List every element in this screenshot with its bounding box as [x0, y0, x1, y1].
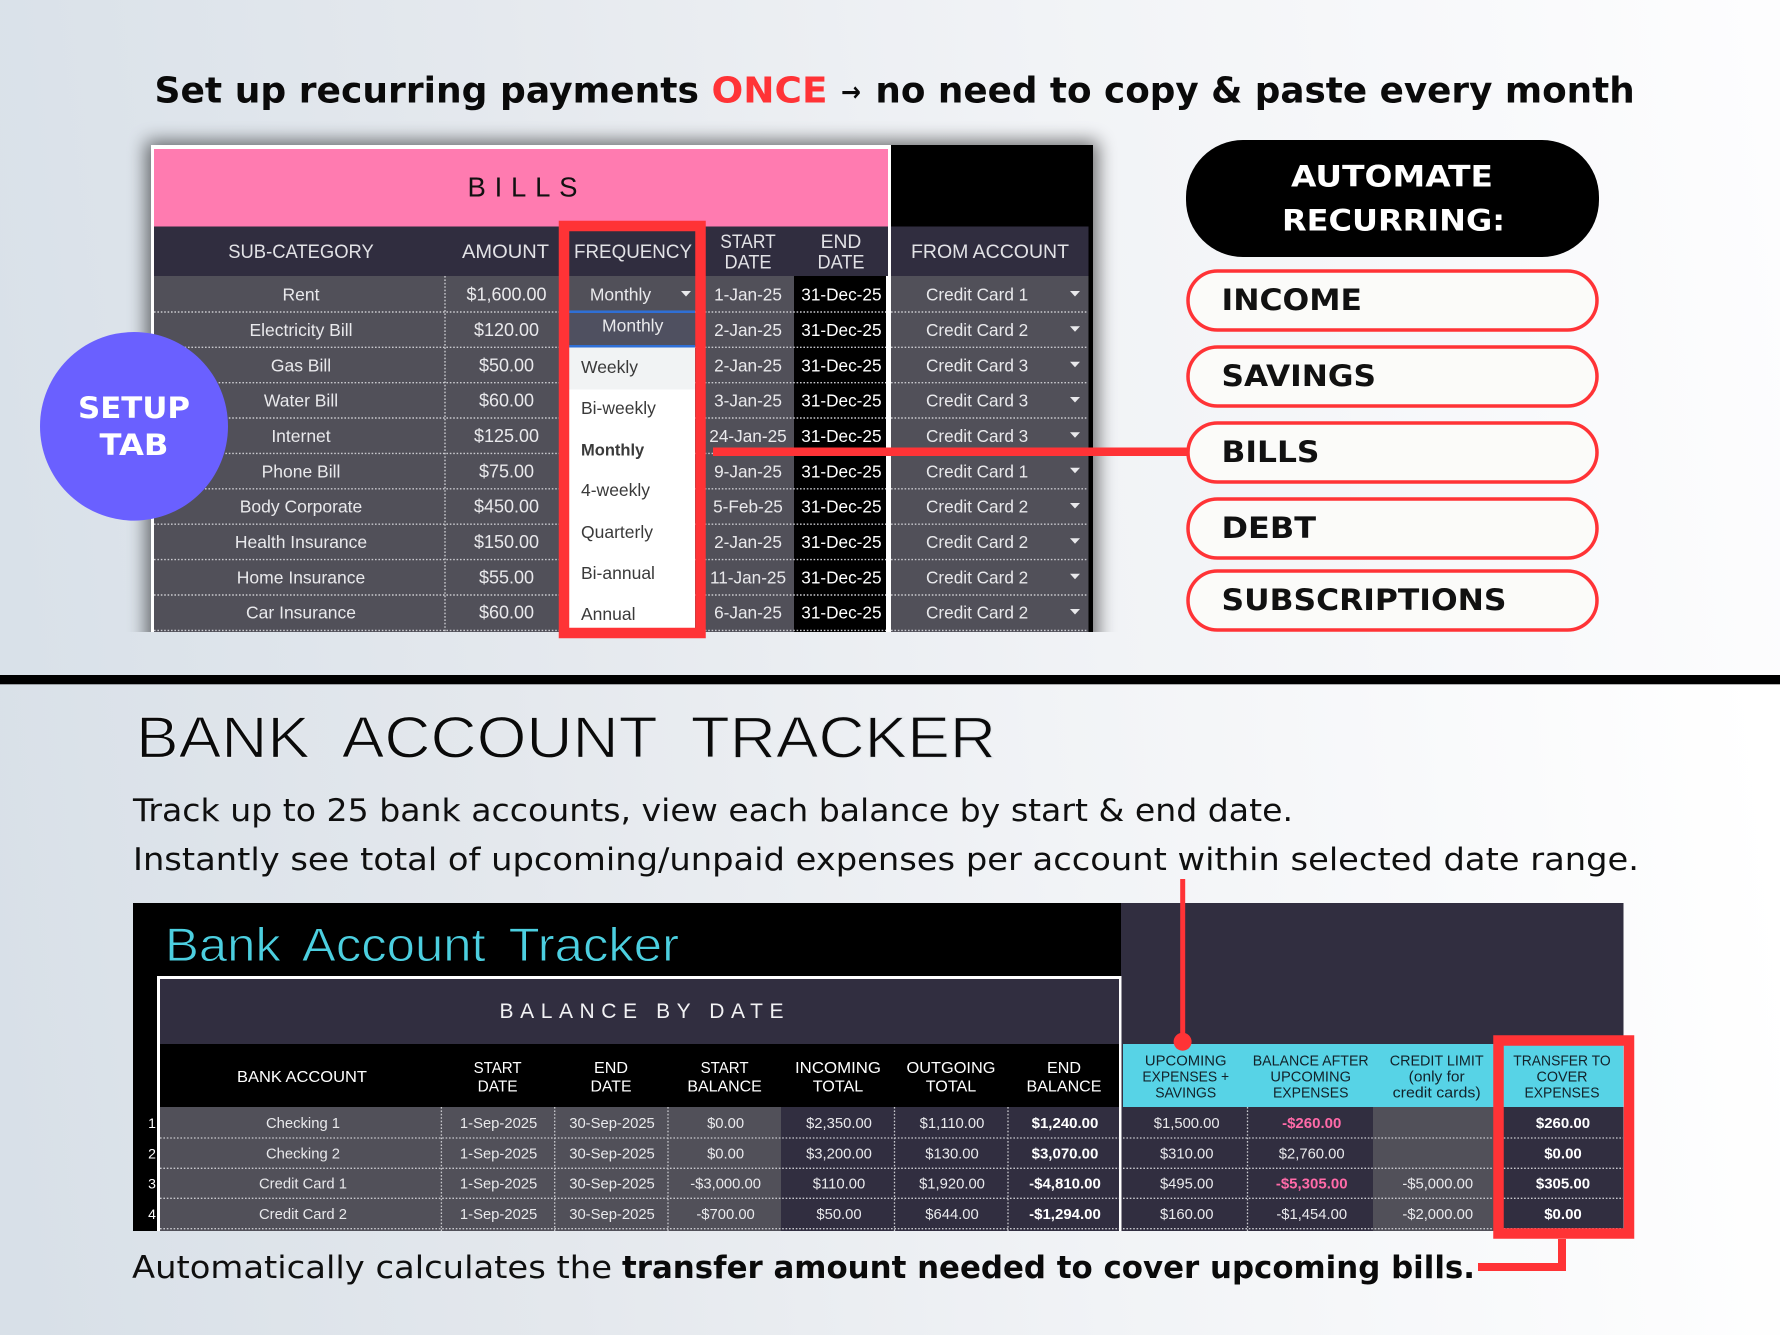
pill: income	[1188, 271, 1597, 330]
arrow: pointer to upcoming expenses	[1174, 879, 1192, 1051]
row: credit card 1: -$5,305.00	[1276, 1176, 1348, 1192]
row: checking 2: $2,760.00	[1279, 1146, 1345, 1162]
sub-category column: Internet	[271, 426, 331, 446]
from account column: Credit Card 3	[926, 391, 1028, 411]
pill: income: INCOME	[1222, 283, 1362, 317]
bills header row: FREQUENCY	[574, 242, 692, 263]
badge: setup tab: SETUP	[78, 391, 190, 425]
balance header row: BALANCE	[687, 1079, 762, 1096]
description text: Instantly see total of upcoming/unpaid expenses per account within selected date range.	[133, 842, 1639, 878]
end date column: 31-Dec-25	[801, 567, 882, 587]
frequency dropdown: Bi-weekly	[581, 398, 656, 418]
bills header row: DATE	[818, 253, 864, 274]
cyan header row: BALANCE AFTER	[1253, 1053, 1369, 1070]
row: credit card 2: 30-Sep-2025	[569, 1207, 655, 1223]
from account column: Credit Card 3	[926, 355, 1028, 375]
balance header row: BALANCE	[1026, 1079, 1102, 1096]
balance header row: END	[1047, 1060, 1081, 1077]
start date column: 6-Jan-25	[714, 603, 782, 623]
row: checking 2: $3,200.00	[806, 1146, 872, 1162]
row: checking 2: $0.00	[707, 1146, 744, 1162]
row: credit card 1: -$3,000.00	[690, 1176, 761, 1192]
cyan header row	[1123, 1044, 1624, 1107]
row: credit card 1: $305.00	[1536, 1176, 1590, 1192]
from account column: Credit Card 2	[926, 603, 1028, 623]
row: credit card 2: $160.00	[1160, 1207, 1213, 1223]
row: credit card 1: $1,920.00	[919, 1176, 985, 1192]
end date column: 31-Dec-25	[801, 391, 882, 411]
spreadsheet title: Bank Account Tracker	[165, 918, 679, 971]
row: credit card 1	[259, 1176, 1590, 1192]
start date column: 2-Jan-25	[714, 532, 782, 552]
frequency dropdown: Monthly	[602, 316, 664, 336]
end date column: 31-Dec-25	[801, 461, 882, 481]
row: checking 1: $260.00	[1536, 1115, 1590, 1132]
amount column: $450.00	[474, 497, 539, 517]
from account column: Credit Card 3	[926, 426, 1028, 446]
row: credit card 1: $495.00	[1160, 1176, 1213, 1192]
balance header row: DATE	[478, 1079, 518, 1096]
heading: set up recurring payments once	[154, 71, 1635, 112]
callout frame: frequency column	[564, 226, 700, 633]
bills header row: FROM ACCOUNT	[911, 242, 1069, 263]
row: credit card 1: 1-Sep-2025	[460, 1176, 537, 1192]
frequency dropdown	[569, 276, 695, 628]
start date column	[709, 285, 787, 623]
frequency dropdown: Monthly	[590, 285, 651, 305]
badge: setup tab: TAB	[100, 428, 168, 462]
cyan header row: TRANSFER TO	[1513, 1053, 1611, 1070]
start date column: 24-Jan-25	[709, 426, 787, 446]
cyan header row: SAVINGS	[1155, 1085, 1216, 1102]
panel: bills spreadsheet	[151, 145, 1093, 632]
bills header row: START	[720, 232, 776, 253]
row: checking 2: Checking 2	[266, 1146, 340, 1162]
arrow: connector from transfer column to caption	[1478, 1239, 1562, 1267]
row: credit card 2: -$1,454.00	[1276, 1207, 1347, 1223]
row: credit card 1: 30-Sep-2025	[569, 1176, 655, 1192]
row: credit card 2: $50.00	[816, 1207, 862, 1223]
row: checking 2	[266, 1146, 1582, 1162]
description text	[132, 793, 1639, 878]
cyan header row: credit cards)	[1393, 1085, 1481, 1102]
balance by date band: BALANCE BY DATE	[500, 1000, 784, 1023]
frequency dropdown: 4-weekly	[581, 480, 650, 500]
from account column: Credit Card 1	[926, 461, 1028, 481]
amount column: $60.00	[479, 603, 534, 623]
balance header row: BANK ACCOUNT	[237, 1069, 368, 1086]
row: credit card 2: -$2,000.00	[1402, 1207, 1473, 1223]
cyan header row: EXPENSES +	[1142, 1069, 1229, 1086]
start date column: 5-Feb-25	[713, 497, 783, 517]
sub-category column: Home Insurance	[237, 567, 365, 587]
from account column: Credit Card 2	[926, 497, 1028, 517]
row: credit card 2: -$700.00	[696, 1207, 755, 1223]
row: credit card 1: -$5,000.00	[1402, 1176, 1473, 1192]
pill: subscriptions	[1188, 571, 1597, 630]
sub-category column: Phone Bill	[262, 461, 340, 481]
row: credit card 2: -$1,294.00	[1029, 1206, 1101, 1223]
amount column: $1,600.00	[466, 285, 547, 305]
sub-category column	[235, 285, 367, 623]
cyan header row: (only for	[1409, 1069, 1465, 1086]
bills title band	[154, 149, 888, 226]
amount column: $150.00	[474, 532, 539, 552]
frequency dropdown: Weekly	[581, 357, 638, 377]
cyan header row: UPCOMING	[1145, 1053, 1226, 1070]
start date column: 3-Jan-25	[714, 391, 782, 411]
heading: bank account tracker: BANK ACCOUNT TRACKER	[136, 706, 996, 771]
bills header row: END	[821, 232, 861, 253]
row: credit card 2: 1-Sep-2025	[460, 1207, 537, 1223]
balance header row: TOTAL	[813, 1079, 864, 1096]
frequency dropdown: Bi-annual	[581, 563, 655, 583]
amount column: $125.00	[474, 426, 539, 446]
frequency dropdown: Monthly	[581, 442, 645, 460]
caption: transfer amount: Automatically calculates the	[132, 1250, 612, 1286]
bills header row: SUB-CATEGORY	[228, 242, 374, 263]
bills header row: DATE	[724, 253, 772, 274]
row: checking 1: $1,240.00	[1032, 1115, 1098, 1132]
balance header row: END	[594, 1060, 628, 1077]
frequency dropdown: Quarterly	[581, 522, 653, 542]
end date column: 31-Dec-25	[801, 320, 882, 340]
sub-category column: Health Insurance	[235, 532, 367, 552]
sub-category column: Electricity Bill	[249, 320, 353, 340]
start date column: 2-Jan-25	[714, 355, 782, 375]
amount column: $120.00	[474, 320, 539, 340]
sub-category column: Gas Bill	[271, 355, 331, 375]
row: checking 2: $310.00	[1160, 1146, 1213, 1162]
row: checking 1: $2,350.00	[806, 1116, 872, 1132]
balance header row: TOTAL	[926, 1079, 977, 1096]
sub-category column: Car Insurance	[246, 603, 356, 623]
row: credit card 1: -$4,810.00	[1029, 1176, 1101, 1192]
row numbers	[148, 1115, 156, 1222]
pill: debt: DEBT	[1222, 511, 1316, 545]
from account column: Credit Card 1	[926, 285, 1028, 305]
balance header row: INCOMING	[795, 1060, 881, 1077]
pill: savings	[1188, 347, 1597, 406]
from account column: Credit Card 2	[926, 532, 1028, 552]
row: credit card 2: $0.00	[1544, 1206, 1582, 1223]
end date column	[801, 285, 882, 623]
start date column: 1-Jan-25	[714, 285, 782, 305]
row numbers: 1	[148, 1115, 156, 1131]
row: checking 2: $3,070.00	[1032, 1146, 1098, 1162]
row: checking 2: $0.00	[1544, 1146, 1582, 1162]
heading: set up recurring payments once: →	[841, 77, 861, 108]
row: credit card 2: $644.00	[925, 1207, 979, 1223]
row numbers: 3	[148, 1176, 156, 1192]
end date column: 31-Dec-25	[801, 426, 882, 446]
bills header row: AMOUNT	[462, 242, 549, 263]
balance header row: DATE	[590, 1079, 632, 1096]
cyan header row: EXPENSES	[1273, 1085, 1348, 1102]
row: checking 1: $0.00	[707, 1116, 744, 1132]
end date column: 31-Dec-25	[801, 497, 882, 517]
row: credit card 1: Credit Card 1	[259, 1176, 347, 1192]
from account column: Credit Card 2	[926, 320, 1028, 340]
pill: bills	[1188, 423, 1597, 482]
heading: set up recurring payments once: ONCE	[712, 71, 828, 112]
from account column	[926, 285, 1080, 623]
row numbers: 2	[148, 1146, 156, 1162]
sub-category column: Body Corporate	[240, 497, 362, 517]
start date column: 9-Jan-25	[714, 461, 782, 481]
row: credit card 1: $110.00	[813, 1176, 865, 1192]
row: checking 1	[266, 1115, 1590, 1132]
row: checking 1: Checking 1	[266, 1116, 340, 1132]
balance by date band	[157, 976, 1122, 1231]
cyan header row: UPCOMING	[1270, 1069, 1351, 1086]
balance header row: START	[474, 1060, 522, 1077]
row: checking 1: $1,500.00	[1154, 1116, 1220, 1132]
row: checking 1: $1,110.00	[920, 1116, 984, 1132]
pill: bills: BILLS	[1222, 435, 1320, 469]
amount column: $55.00	[479, 567, 534, 587]
heading: set up recurring payments once: no need to copy & paste every month	[875, 71, 1635, 112]
badge: setup tab	[40, 332, 228, 521]
end date column: 31-Dec-25	[801, 532, 882, 552]
cyan header row: CREDIT LIMIT	[1390, 1053, 1484, 1070]
start date column: 11-Jan-25	[710, 567, 786, 587]
row: checking 1: 1-Sep-2025	[460, 1116, 537, 1132]
arrow: connector to bills pill	[713, 448, 1188, 456]
row: checking 1: 30-Sep-2025	[569, 1116, 655, 1132]
callout frame: transfer column	[1498, 1040, 1629, 1234]
bills title band: BILLS	[468, 172, 578, 203]
pill: automate recurring	[1186, 140, 1599, 257]
pill: automate recurring: AUTOMATE	[1291, 160, 1493, 194]
panel: bank account tracker spreadsheet	[133, 903, 1624, 1231]
row: checking 1: -$260.00	[1282, 1115, 1341, 1132]
row: checking 2: $130.00	[925, 1146, 979, 1162]
sub-category column: Rent	[283, 285, 320, 305]
amount column: $75.00	[479, 461, 534, 481]
pill: subscriptions: SUBSCRIPTIONS	[1222, 583, 1506, 617]
description text: Track up to 25 bank accounts, view each balance by start & end date.	[132, 793, 1293, 829]
end date column: 31-Dec-25	[801, 355, 882, 375]
row: checking 2: 1-Sep-2025	[460, 1146, 537, 1162]
end date column: 31-Dec-25	[801, 285, 882, 305]
panel: bills table shadow	[146, 141, 1098, 661]
heading: set up recurring payments once: Set up recurring payments	[154, 71, 699, 112]
amount column: $60.00	[479, 391, 534, 411]
amount column: $50.00	[479, 355, 534, 375]
balance header row: OUTGOING	[906, 1060, 996, 1077]
row: checking 2: 30-Sep-2025	[569, 1146, 655, 1162]
caption: transfer amount: transfer amount needed to cover upcoming bills.	[622, 1250, 1475, 1286]
cyan header row: COVER	[1536, 1069, 1588, 1086]
pill: savings: SAVINGS	[1222, 359, 1376, 393]
frequency dropdown: Annual	[581, 604, 636, 624]
end date column: 31-Dec-25	[801, 603, 882, 623]
cyan header row: EXPENSES	[1524, 1085, 1600, 1102]
amount column	[466, 285, 547, 623]
row: credit card 2: Credit Card 2	[259, 1207, 347, 1223]
bills header row	[154, 226, 1088, 276]
balance header row	[237, 1060, 1102, 1096]
caption: transfer amount	[132, 1250, 1475, 1286]
pill: automate recurring: RECURRING:	[1282, 204, 1505, 238]
row numbers: 4	[148, 1206, 156, 1222]
row: credit card 2	[259, 1206, 1582, 1223]
start date column: 2-Jan-25	[714, 320, 782, 340]
balance header row: START	[701, 1060, 749, 1077]
pill: debt	[1188, 499, 1597, 558]
from account column: Credit Card 2	[926, 567, 1028, 587]
sub-category column: Water Bill	[264, 391, 338, 411]
